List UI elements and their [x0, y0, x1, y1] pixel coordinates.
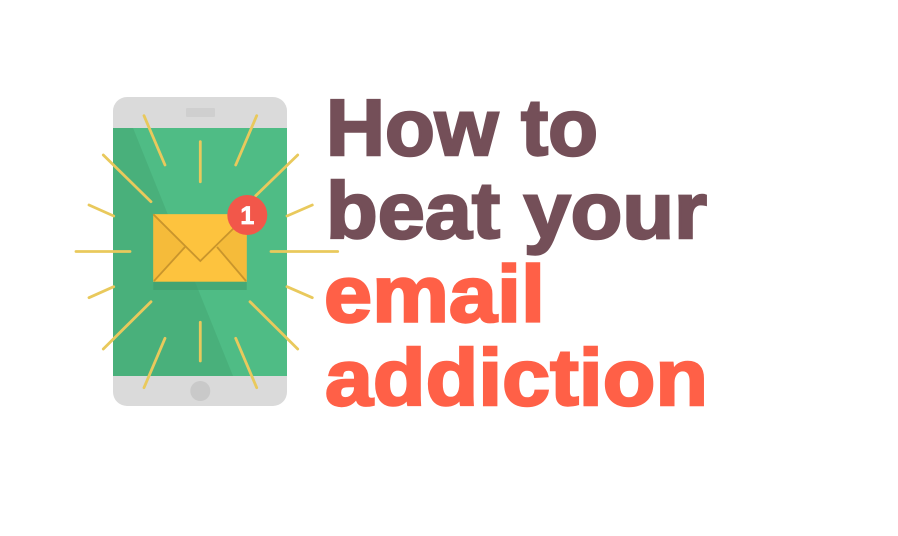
icon: envelope: [153, 214, 247, 290]
title: [324, 83, 708, 422]
icon: notification badge: 1: [240, 202, 254, 230]
title: addiction: [325, 333, 708, 422]
title: How to: [326, 83, 598, 172]
title: email: [324, 250, 545, 338]
title: beat your: [326, 166, 707, 255]
icon: smartphone: [113, 97, 287, 406]
icon: radiating notification rays: [76, 116, 338, 388]
icon: notification badge: [227, 195, 267, 235]
